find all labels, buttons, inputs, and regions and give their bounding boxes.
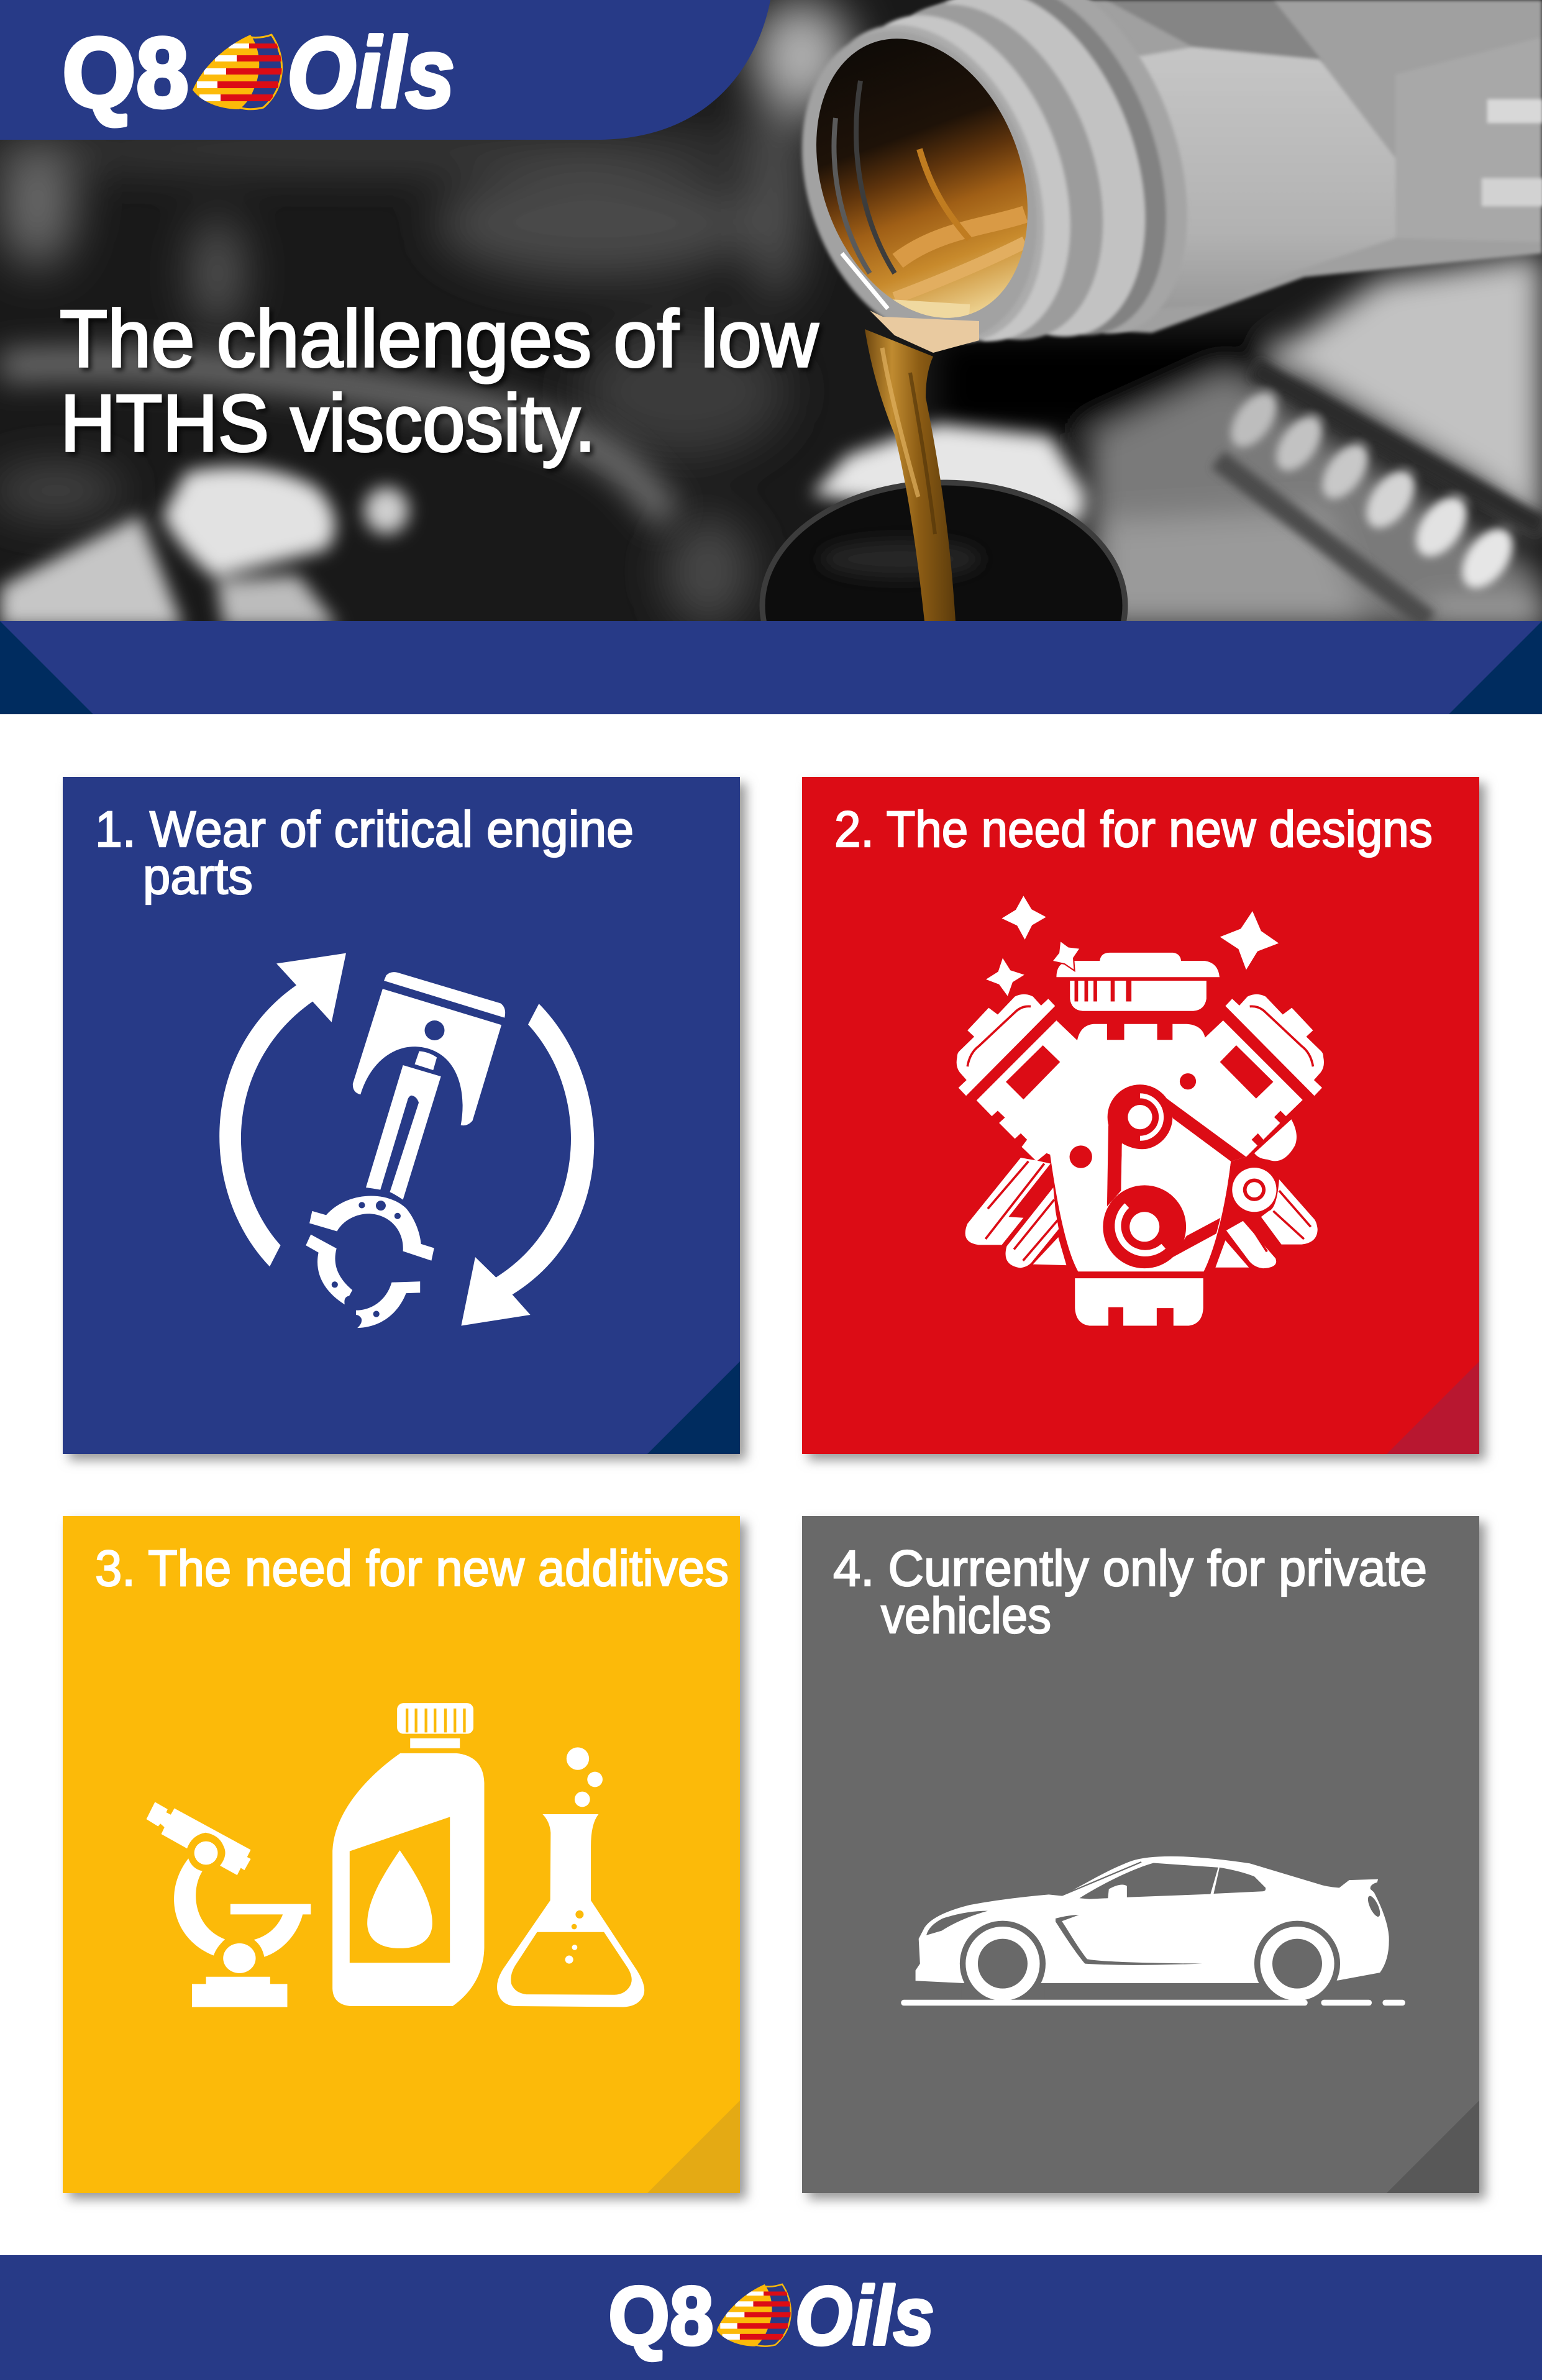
blurred engine background right — [938, 253, 1542, 627]
heading 1: 1. Wear of critical engine — [95, 801, 634, 858]
title: HTHS viscosity. — [60, 378, 596, 468]
bottle mouth with amber oil — [816, 39, 1028, 318]
teeth — [1226, 384, 1284, 452]
flask — [497, 1747, 644, 2007]
icon: sparkling engine — [957, 896, 1324, 1326]
microscope — [147, 1802, 311, 2007]
blurred engine background left — [0, 0, 851, 627]
header logo: Q8 Oils: Q8 — [62, 17, 189, 128]
hero photo: oil pouring from bottle — [0, 0, 1542, 621]
header logo: Q8 Oils — [62, 17, 455, 128]
footer logo sail mark — [717, 2284, 792, 2346]
heading 2: 2. The need for new designs — [834, 801, 1433, 858]
engine block — [977, 1020, 1303, 1271]
blurred bright engine parts left — [0, 467, 409, 627]
blurred diagonal hose — [0, 364, 670, 517]
heading 1: parts — [143, 848, 253, 905]
header logo: Q8 Oils: Oils — [287, 17, 455, 128]
heading 1 — [95, 801, 634, 905]
icon: piston with rotating arrows — [219, 953, 594, 1328]
heading 4: 4. Currently only for private — [833, 1540, 1427, 1597]
panel 3: the need for new additives — [63, 1516, 746, 2199]
pouring oil stream — [842, 253, 979, 621]
logo panel — [0, 0, 770, 140]
footer band — [0, 2255, 1542, 2380]
heading 3: 3. The need for new additives — [95, 1540, 729, 1597]
funnel with dark oil — [759, 479, 1128, 621]
cylinder heads — [957, 994, 1055, 1096]
panel 1: wear of critical engine parts — [63, 777, 746, 1460]
logo sail mark — [193, 35, 283, 109]
bottle neck ridges — [800, 0, 1187, 345]
footer logo: Q8 Oils — [608, 2270, 934, 2363]
footer logo: Q8 Oils: Q8 — [608, 2270, 714, 2363]
title: The challenges of low — [60, 293, 819, 384]
panel 4: currently only for private vehicles — [802, 1516, 1485, 2199]
oil bottle — [332, 1703, 484, 2006]
heading 4 — [833, 1540, 1427, 1644]
lower fins — [965, 1158, 1051, 1245]
bottle shoulder and body — [872, 0, 1542, 340]
heading 4: vehicles — [881, 1587, 1051, 1644]
title — [60, 293, 819, 468]
oil pan — [1075, 1278, 1203, 1326]
icon: sports car — [901, 1856, 1405, 2007]
blue band under photo — [0, 621, 1542, 714]
icon: microscope, oil bottle and flask — [147, 1703, 644, 2007]
footer logo: Q8 Oils: Oils — [795, 2270, 934, 2363]
pulleys — [1128, 1105, 1152, 1129]
panel 2: the need for new designs — [802, 777, 1485, 1460]
